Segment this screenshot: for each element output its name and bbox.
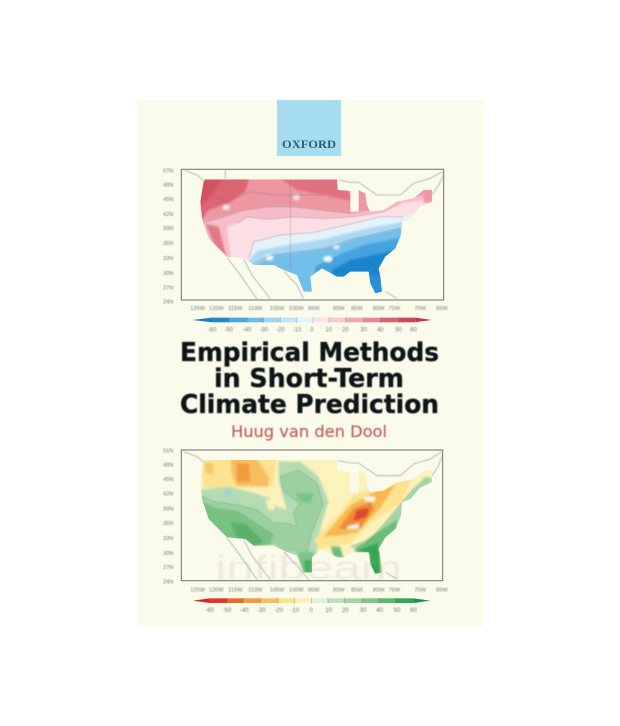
title: in Short-Term bbox=[214, 364, 404, 394]
book cover bbox=[137, 100, 483, 626]
publisher panel: Oxford: OXFORD bbox=[282, 139, 336, 151]
colour legend: red to green bbox=[193, 598, 430, 614]
latitude labels: 27N bbox=[163, 285, 173, 291]
map: precipitation anomaly in orange and green bbox=[163, 449, 448, 614]
colour legend: blue to red bbox=[192, 317, 432, 333]
longitude labels: 65W bbox=[436, 306, 448, 312]
colour legend: blue to red: 20 bbox=[342, 327, 349, 333]
colour legend: red to green: 30 bbox=[360, 608, 367, 614]
filled contours bbox=[200, 179, 432, 294]
latitude labels: 27N bbox=[163, 565, 173, 571]
colour legend: red to green: 40 bbox=[376, 608, 384, 614]
coastlines and borders bbox=[184, 170, 444, 299]
longitude labels: 105W bbox=[270, 588, 285, 594]
latitude labels: 33N bbox=[163, 536, 173, 542]
colour legend: blue to red: -40 bbox=[243, 327, 252, 333]
colour legend: blue to red: -50 bbox=[224, 327, 234, 333]
colour legend: blue to red: 30 bbox=[360, 327, 368, 333]
title: Empirical Methods bbox=[180, 338, 439, 368]
longitude labels: 70W bbox=[414, 588, 427, 594]
colour legend: blue to red: 60 bbox=[410, 327, 418, 333]
latitude labels: 36N bbox=[163, 241, 173, 247]
longitude labels: 120W bbox=[209, 588, 224, 594]
colour legend: blue to red: -20 bbox=[276, 327, 285, 333]
colour legend: red to green: -50 bbox=[223, 608, 232, 614]
longitude labels: 100W bbox=[289, 588, 304, 594]
latitude labels: 57N bbox=[163, 169, 173, 175]
latitude labels: 39N bbox=[163, 226, 173, 232]
longitude labels: 120W bbox=[209, 306, 224, 312]
latitude labels: 45N bbox=[163, 477, 173, 483]
longitude labels bbox=[190, 588, 448, 594]
longitude labels: 105W bbox=[270, 306, 285, 312]
longitude labels bbox=[190, 306, 448, 312]
longitude labels: 110W bbox=[248, 588, 263, 594]
colour legend: blue to red: -60 bbox=[208, 327, 217, 333]
colour legend: blue to red: 40 bbox=[377, 327, 384, 333]
colour legend: red to green: 50 bbox=[394, 608, 401, 614]
latitude labels: 24N bbox=[163, 580, 173, 586]
map: temperature anomaly in red and blue bbox=[163, 169, 448, 333]
colour legend: red to green: 0 bbox=[310, 608, 314, 614]
colour legend: red to green: -20 bbox=[274, 608, 284, 614]
longitude labels: 75W bbox=[388, 306, 401, 312]
colour legend: blue to red: -30 bbox=[259, 327, 269, 333]
colour legend: red to green: 10 bbox=[325, 608, 333, 614]
colour legend: red to green: -30 bbox=[257, 608, 266, 614]
title: Climate Prediction bbox=[180, 390, 439, 420]
longitude labels: 125W bbox=[190, 306, 206, 312]
contour lines bbox=[200, 179, 404, 268]
latitude labels: 24N bbox=[163, 299, 173, 305]
latitude labels: 48N bbox=[163, 183, 173, 189]
longitude labels: 115W bbox=[228, 588, 243, 594]
colour legend: red to green: -10 bbox=[290, 608, 300, 614]
colour legend: red to green: 60 bbox=[410, 608, 418, 614]
longitude labels: 90W bbox=[333, 306, 345, 312]
longitude labels: 100W bbox=[289, 306, 304, 312]
longitude labels: 115W bbox=[228, 306, 243, 312]
longitude labels: 70W bbox=[414, 306, 427, 312]
latitude labels: 39N bbox=[163, 506, 173, 512]
longitude labels: 90W bbox=[333, 588, 345, 594]
colour legend: blue to red: 0 bbox=[310, 327, 314, 333]
latitude labels bbox=[163, 169, 173, 305]
latitude labels: 30N bbox=[163, 271, 173, 277]
longitude labels: 75W bbox=[388, 588, 401, 594]
colour legend: red to green: -40 bbox=[240, 608, 249, 614]
longitude labels: 80W bbox=[373, 306, 385, 312]
latitude labels: 42N bbox=[163, 212, 173, 218]
latitude labels: 33N bbox=[163, 256, 173, 262]
latitude labels: 42N bbox=[163, 492, 173, 498]
latitude labels: 30N bbox=[163, 551, 173, 557]
latitude labels: 45N bbox=[163, 197, 173, 203]
contour lines bbox=[199, 470, 414, 552]
author: Huug van den Dool bbox=[231, 422, 387, 441]
watermark: infibeam bbox=[215, 550, 402, 587]
publisher panel: Oxford bbox=[277, 100, 341, 156]
filled contours bbox=[200, 460, 432, 574]
colour legend: red to green: -60 bbox=[205, 608, 215, 614]
colour legend: blue to red: 50 bbox=[395, 327, 403, 333]
title bbox=[180, 338, 439, 420]
longitude labels: 125W bbox=[190, 588, 206, 594]
colour legend: blue to red: 10 bbox=[325, 327, 333, 333]
latitude labels: 48N bbox=[163, 463, 173, 469]
longitude labels: 85W bbox=[351, 306, 363, 312]
longitude labels: 85W bbox=[351, 588, 363, 594]
latitude labels: 36N bbox=[163, 521, 173, 527]
coastlines and borders bbox=[184, 452, 442, 580]
latitude labels bbox=[163, 449, 173, 586]
latitude labels: 51N bbox=[163, 449, 173, 455]
colour legend: red to green: 20 bbox=[342, 608, 349, 614]
longitude labels: 110W bbox=[248, 306, 263, 312]
colour legend: blue to red: -10 bbox=[293, 327, 302, 333]
longitude labels: 65W bbox=[436, 588, 448, 594]
longitude labels: 80W bbox=[373, 588, 385, 594]
longitude labels: 95W bbox=[308, 306, 320, 312]
longitude labels: 95W bbox=[308, 588, 320, 594]
